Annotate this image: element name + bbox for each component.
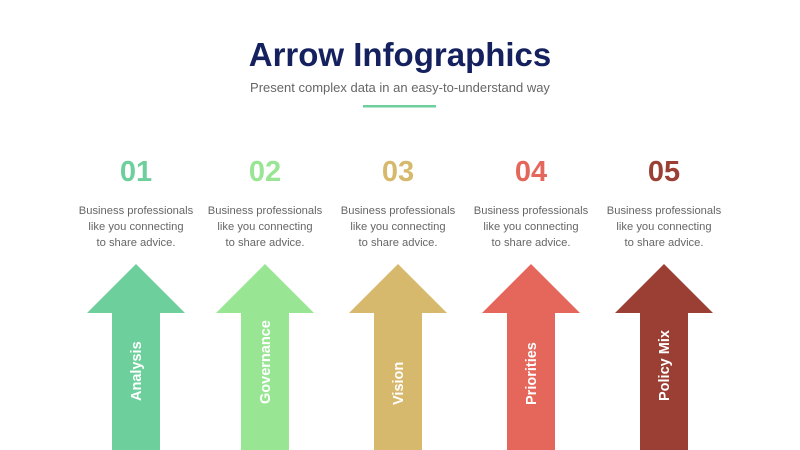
panel: step 04: like you connecting xyxy=(483,221,579,233)
panel: step 01: Business professionals xyxy=(79,205,194,217)
panel: step 01: like you connecting xyxy=(88,221,184,233)
panel: step 01 xyxy=(79,156,194,450)
panel: step 04 xyxy=(474,156,589,450)
title: Arrow Infographics xyxy=(249,36,551,73)
panel: step 05 xyxy=(607,156,722,450)
panel: step 02: Business professionals xyxy=(208,205,323,217)
panel: step 02: 02 xyxy=(249,156,281,188)
panel: step 03: 03 xyxy=(382,156,414,188)
panel: step 03: Vision xyxy=(391,362,407,405)
panel: step 04: to share advice. xyxy=(492,237,570,249)
panel: step 03: like you connecting xyxy=(350,221,446,233)
underline accent xyxy=(363,105,436,108)
panel: step 05: Business professionals xyxy=(607,205,722,217)
panel: step 04: Business professionals xyxy=(474,205,589,217)
panel: step 03 xyxy=(341,156,456,450)
panel: step 02 xyxy=(208,156,323,450)
panel: step 03: to share advice. xyxy=(359,237,437,249)
panel: step 04: Priorities xyxy=(524,342,540,405)
subtitle: Present complex data in an easy-to-understand way xyxy=(250,80,550,95)
panel: step 01: to share advice. xyxy=(97,237,175,249)
panel: step 01: Analysis xyxy=(129,341,145,401)
panel: step 02: to share advice. xyxy=(226,237,304,249)
panel: step 05: like you connecting xyxy=(616,221,712,233)
panel: step 03: Business professionals xyxy=(341,205,456,217)
panel: step 01: 01 xyxy=(120,156,152,188)
panel: step 05: 05 xyxy=(648,156,680,188)
panel: step 05: Policy Mix xyxy=(657,330,673,401)
panel: step 02: like you connecting xyxy=(217,221,313,233)
panel: step 05: to share advice. xyxy=(625,237,703,249)
panel: step 04: 04 xyxy=(515,156,547,188)
panel: step 02: Governance xyxy=(258,320,274,404)
